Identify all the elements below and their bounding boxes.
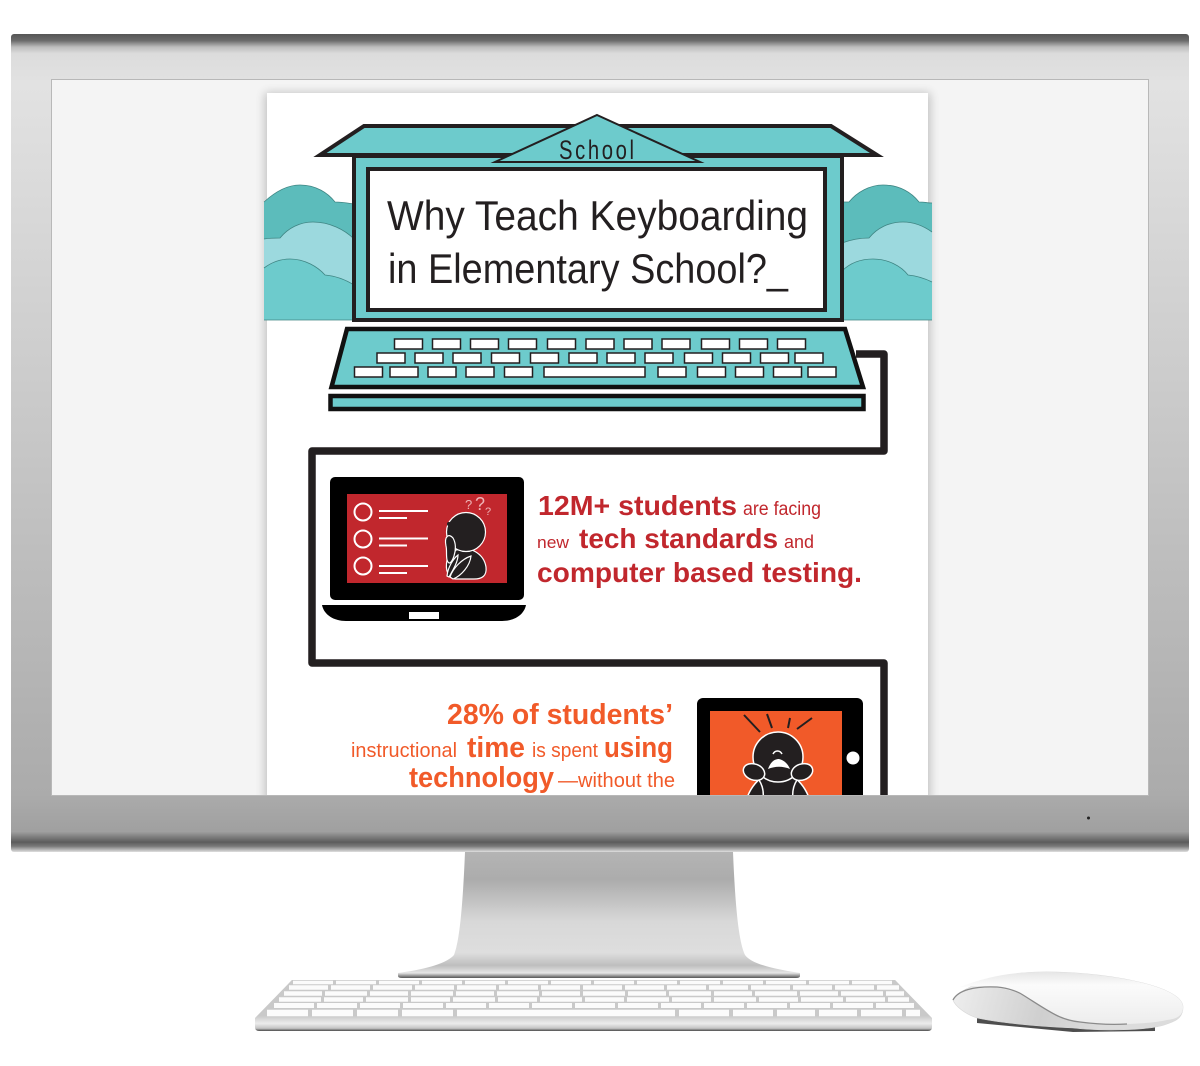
- text block: 12M+ students: 12M+ students: [538, 490, 737, 521]
- stressed student figure: [742, 731, 814, 795]
- confused student figure: [446, 512, 486, 579]
- keyboard front bar: [330, 396, 864, 409]
- title screen: [368, 169, 825, 310]
- quiz answer options: [354, 504, 428, 574]
- text block: 28% of students: 28% of students’: [447, 699, 673, 731]
- infographic page: [264, 93, 932, 818]
- clouds: right: [842, 185, 932, 320]
- school roof: [320, 126, 877, 155]
- monitor frame: [11, 34, 1189, 852]
- wireless mouse: [953, 972, 1183, 1032]
- icon: laptop with confused student: [322, 477, 526, 621]
- text block: 28% of students: using: [604, 732, 673, 764]
- text block: 12M+ students: new: [537, 533, 570, 552]
- keyboard keys: [267, 982, 920, 1013]
- text block: 28% of students: time: [467, 732, 525, 764]
- stress lines: [744, 714, 812, 732]
- text block: 28% of students: is spent: [532, 740, 598, 762]
- text block: 28% of students: —without the: [558, 770, 675, 792]
- text block: 12M+ students: are facing: [743, 499, 821, 520]
- question marks: ?: [465, 497, 472, 512]
- keys: [354, 339, 836, 377]
- question marks: [466, 497, 491, 515]
- title: [387, 192, 808, 292]
- question marks: ?: [485, 506, 491, 518]
- clouds: left: [264, 185, 354, 320]
- title: in Elementary School?_: [388, 245, 789, 292]
- text block: 12M+ students: and: [784, 532, 814, 552]
- wireless keyboard: [255, 980, 932, 1031]
- text block: 12M+ students: computer based testing.: [537, 557, 862, 588]
- text block: 28% of students: technology: [409, 762, 554, 794]
- school building: [354, 156, 842, 320]
- icon: tablet with stressed student: [697, 698, 863, 795]
- gable with school label: [495, 115, 700, 166]
- connecting cable: [312, 354, 884, 810]
- title: Why Teach Keyboarding: [387, 192, 808, 239]
- text block: 28% of students: [351, 699, 675, 794]
- text block: 12M+ students: tech standards: [579, 523, 778, 554]
- text block: 12M+ students: [537, 490, 862, 588]
- question marks: ?: [475, 494, 485, 514]
- monitor screen: [52, 80, 1148, 796]
- text block: 28% of students: instructional: [351, 740, 457, 762]
- monitor stand: [398, 852, 800, 978]
- gable with school label: School: [559, 135, 637, 166]
- power indicator light: [1087, 816, 1090, 820]
- keyboard: [332, 329, 863, 387]
